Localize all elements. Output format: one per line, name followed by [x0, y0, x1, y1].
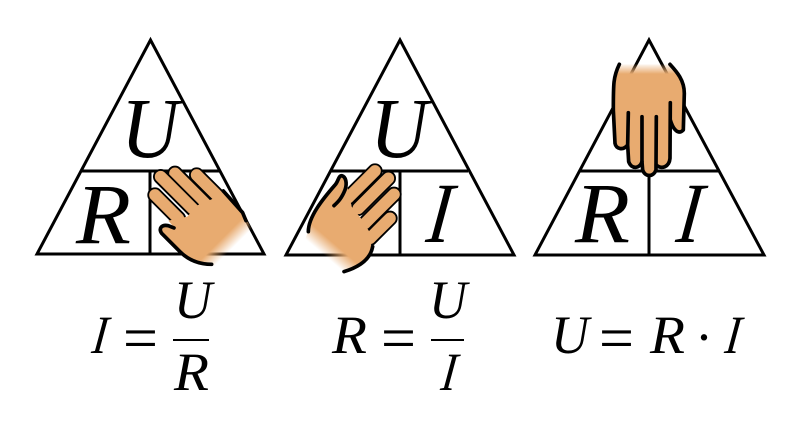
letter U: U — [370, 80, 433, 176]
letter U: U — [121, 80, 184, 176]
letter I: I — [667, 165, 717, 261]
formula: U = R · I: = — [599, 305, 634, 373]
formula: U = R · I: · — [695, 307, 713, 367]
formula: U = R · I: U — [551, 305, 592, 365]
icon: hand covering U — [613, 64, 685, 177]
formula: I = U / R: I — [86, 305, 117, 365]
formula: R = U / I: R — [331, 305, 367, 365]
formula: I = U / R — [86, 270, 215, 402]
formula: R = U / I: = — [381, 305, 416, 373]
panel: triangle for current — [37, 40, 264, 273]
letter I: I — [417, 165, 467, 261]
formula: R = U / I — [331, 270, 470, 402]
panel: triangle for resistance — [286, 40, 514, 272]
formula: I = U / R: R — [173, 342, 209, 402]
formula: U = R · I — [551, 305, 750, 373]
letter R: R — [75, 166, 131, 262]
formula: I = U / R: U — [174, 270, 215, 330]
icon: hand covering R — [303, 171, 394, 272]
formula: R = U / I: U — [429, 270, 470, 330]
triangle outline — [37, 40, 264, 254]
icon: hand covering I — [155, 173, 260, 273]
letter R: R — [574, 165, 630, 261]
formula: U = R · I: R — [649, 305, 685, 365]
triangle outline — [286, 40, 514, 255]
panel: triangle for voltage — [535, 40, 764, 261]
triangle outline — [535, 40, 764, 255]
formula: I = U / R: = — [123, 305, 158, 373]
formula: U = R · I: I — [719, 305, 750, 365]
formula: R = U / I: I — [435, 342, 466, 402]
